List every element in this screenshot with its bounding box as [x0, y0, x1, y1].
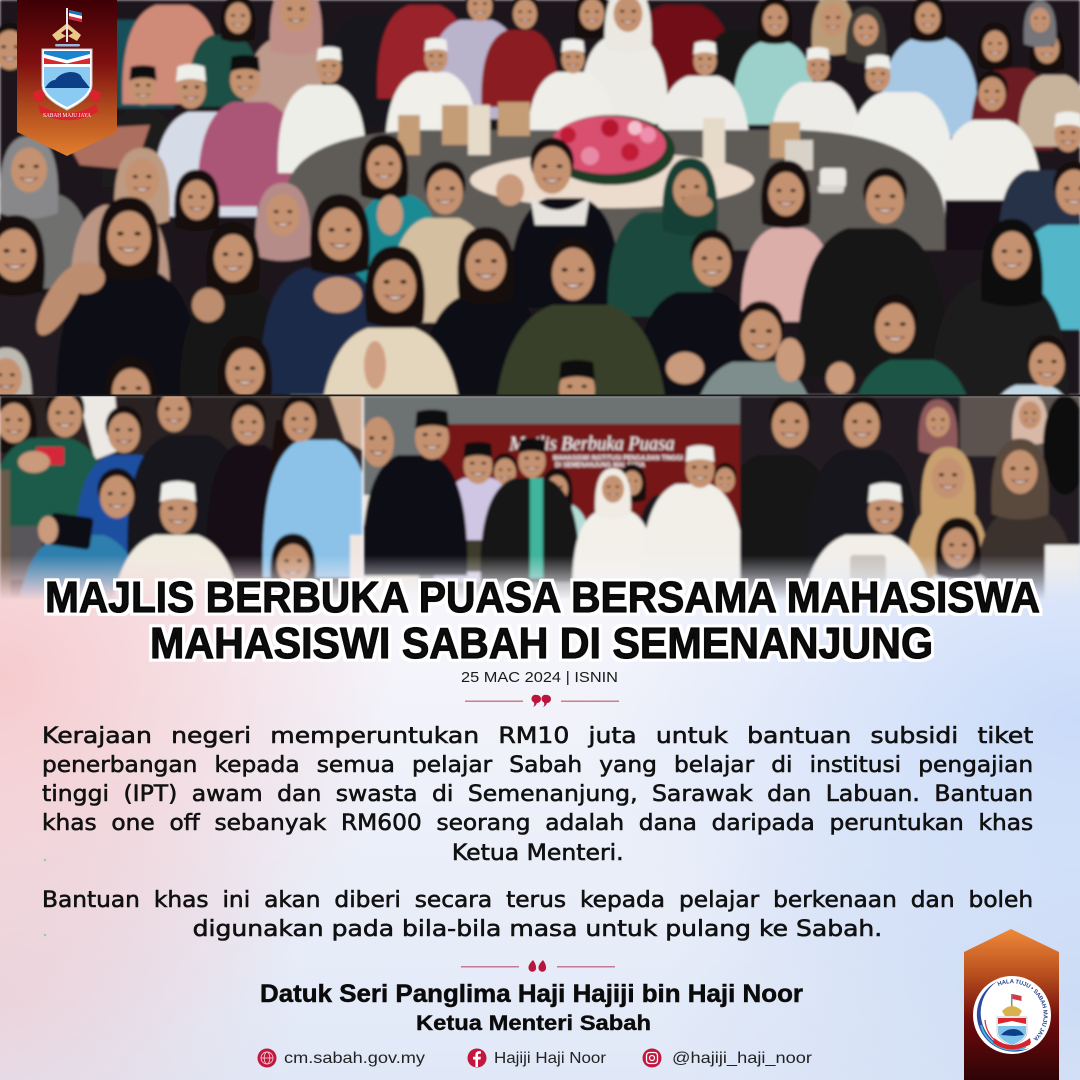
back row of guests: [0, 0, 1080, 150]
speaker role: Ketua Menteri Sabah: [416, 1011, 651, 1035]
lower photo strip: [0, 396, 1080, 598]
contact: facebook: Hajiji Haji Noor: [494, 1050, 607, 1067]
main title: MAHASISWI SABAH DI SEMENANJUNG: [150, 619, 933, 668]
body paragraph one: Kerajaan negeri memperuntukan RM10 juta untuk bantuan subsidi tiket: [42, 722, 1033, 748]
icon: badge: [973, 976, 1051, 1054]
body paragraph one: penerbangan kepada semua pelajar Sabah yang belajar di institusi pengajian: [42, 752, 1033, 778]
body paragraph two: Bantuan khas ini akan diberi secara terus kepada pelajar berkenaan dan boleh: [42, 887, 1033, 913]
body paragraph two: digunakan pada bila-bila masa untuk pulang ke Sabah.: [193, 916, 882, 942]
contact: instagram: @hajiji_haji_noor: [672, 1050, 813, 1067]
front row of students: [0, 174, 1080, 494]
event title: Majlis Berbuka Puasa: [509, 433, 674, 455]
decorative specks: [44, 859, 46, 936]
main title: [45, 573, 1040, 668]
middle row of students: [0, 112, 1080, 376]
top group photo: [0, 0, 1080, 394]
bottom-right banner with slogan badge: [964, 929, 1059, 1080]
photo: students with selfie: [0, 396, 365, 598]
contact: facebook: [468, 1048, 607, 1068]
date: 25 MAC 2024 | ISNIN: [461, 669, 618, 686]
icon: crest: [33, 8, 101, 120]
icon: crest: SABAH MAJU JAYA: [43, 112, 91, 119]
contact: website: cm.sabah.gov.my: [284, 1050, 425, 1067]
speaker name: Datuk Seri Panglima Haji Hajiji bin Haji Noor: [260, 980, 803, 1008]
body paragraph one: khas one off sebanyak RM600 seorang adalah dana daripada peruntukan khas: [42, 810, 1033, 836]
divider with closing quote marks: [461, 960, 615, 972]
top-left banner with state crest: [17, 0, 117, 156]
event title: DI SEMENANJUNG MALAYSIA: [555, 462, 645, 469]
body paragraph one: [42, 722, 1033, 866]
body paragraph two: [42, 887, 1033, 942]
contact: website: [258, 1048, 425, 1068]
event backdrop: [438, 422, 742, 528]
badge slogan: HALA TUJU • SABAH MAJU JAYA: [997, 979, 1048, 1040]
photo: dignitary among students: [738, 396, 1080, 598]
event title: [509, 433, 683, 469]
body paragraph one: tinggi (IPT) awam dan swasta di Semenanjung, Sarawak dan Labuan. Bantuan: [42, 781, 1033, 807]
event title: MAHASISWI INSTITUSI PENGAJIAN TINGGI: [553, 455, 683, 462]
banquet table with flowers: [285, 102, 945, 250]
divider with opening quote marks: [465, 695, 619, 707]
second row of dignitaries: [102, 38, 1042, 250]
contact: instagram: [642, 1048, 813, 1068]
body paragraph one: Ketua Menteri.: [452, 840, 623, 866]
photo: event banner and dignitary: [362, 396, 743, 598]
